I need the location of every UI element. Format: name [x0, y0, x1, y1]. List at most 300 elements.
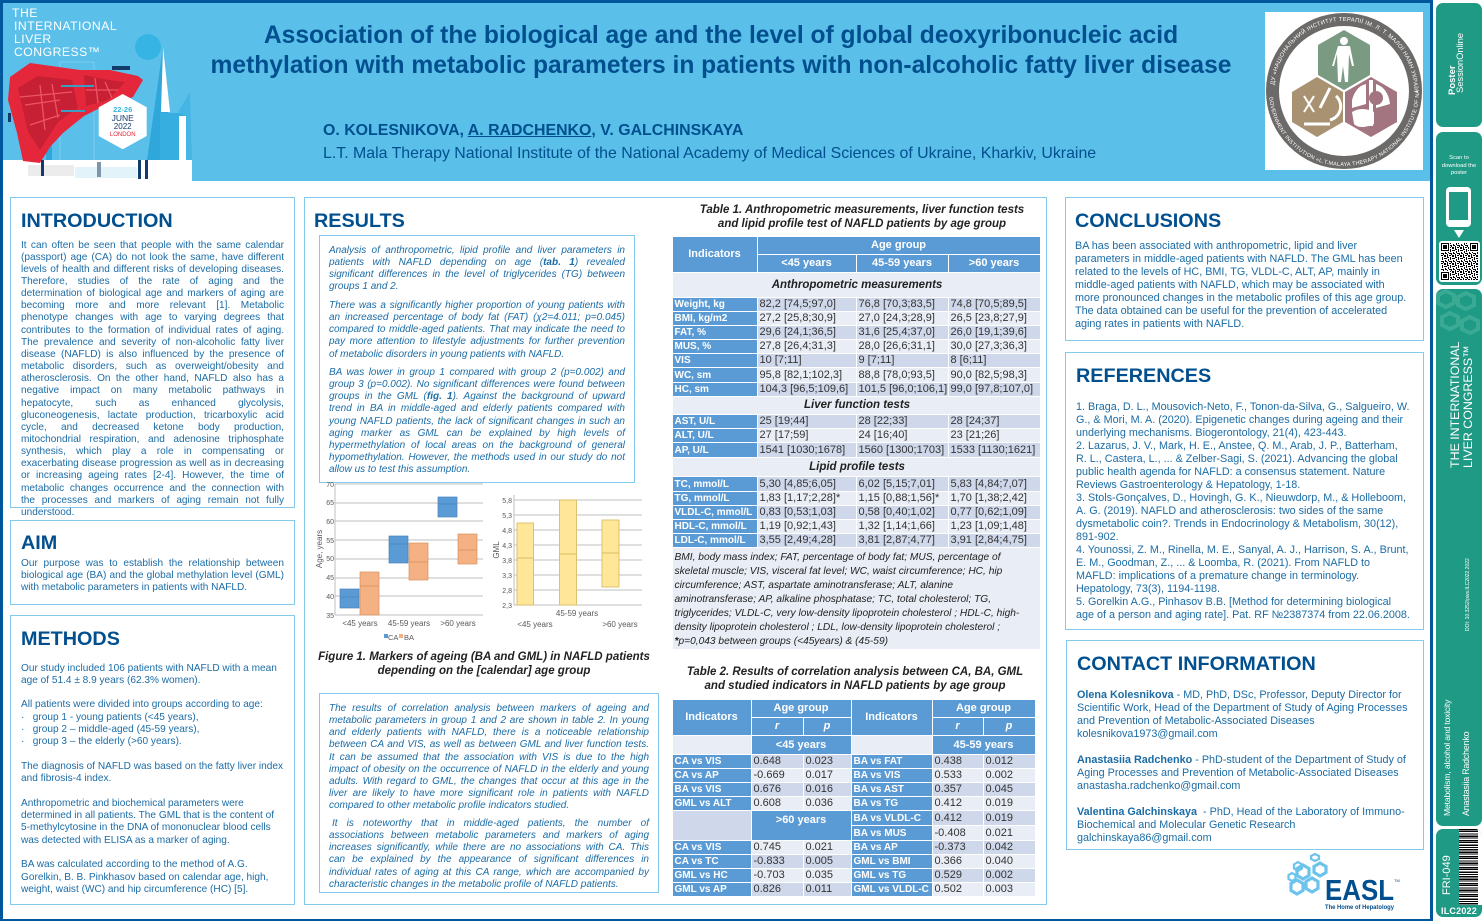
text: references: R. L., Castera, L., ... & Zelber-Sagi, S. (2021). Advancing the global: [1076, 453, 1398, 465]
table 2: 0.502: [934, 883, 962, 895]
text: results paragraph 1: patients with NAFLD depending on age (tab. 1) revealed: [329, 257, 625, 268]
text: references: 3. Stols-Gonçalves, D., Hovingh, G. K., Nieuwdorp, M., & Holleboom,: [1076, 492, 1406, 504]
text: references: 4. Younossi, Z. M., Rinella, M. E., Sanyal, A. J., Harrison, S. A., Brunt,: [1076, 544, 1408, 556]
table 1: 28 [22;33]: [858, 415, 907, 427]
congress banner graphic: [3, 3, 192, 179]
text: results paragraph 3: hypermethylation of local areas on the background of general: [329, 440, 625, 451]
text: results paragraph 2: pay more attention to lifestyle adjustments for further prevention: [329, 336, 625, 347]
table 1: MUS, %: [674, 341, 711, 352]
y axis ticks: 65: [326, 500, 334, 507]
table 2: GML vs ALT: [674, 798, 732, 809]
title: [211, 22, 1231, 79]
panel: correlation text box: [319, 693, 659, 893]
icon: date hexagon: 2022: [114, 122, 132, 131]
heading: results: RESULTS: [314, 210, 405, 232]
y axis ticks: 70: [326, 482, 334, 489]
text: references: Reviews Gastroenterology & Hepatology, 1-18.: [1076, 479, 1300, 491]
heading: conclusions: CONCLUSIONS: [1075, 210, 1221, 232]
table 1: BMI, kg/m2: [674, 313, 727, 324]
text: methods: determined in all patients. The GML that is the content of: [21, 810, 274, 821]
conference tag: ILC2022: [1441, 906, 1477, 916]
y axis ticks: [502, 498, 512, 610]
icon: red liver: [8, 63, 143, 163]
table 2: <45 years: [776, 738, 826, 750]
table 1: 1,19 [0,92;1,43]: [760, 520, 836, 532]
text: correlation paragraph 2: [329, 818, 650, 890]
table 1: ALT, U/L: [674, 430, 714, 441]
x axis labels: >60 years: [602, 620, 638, 629]
text: contact information: Aging Processes and Prevention of Metabolic-Associated Diseases: [1077, 767, 1399, 779]
text: contact information: galchinskaya86@gmail.com: [1077, 832, 1212, 844]
table 1: 28,0 [26,6;31,1]: [858, 340, 935, 352]
table 1: 76,8 [70,3;83,5]: [858, 298, 935, 310]
y axis ticks: [326, 482, 334, 620]
table 1: HDL-C, mmol/L: [674, 521, 747, 532]
presenter vertical: Anastasiia Radchenko: [1461, 732, 1471, 816]
table 1: VIS: [674, 355, 691, 366]
table 2: 0.529: [934, 869, 962, 881]
table 1: BMI, body mass index; FAT, percentage of body fat; MUS, percentage of: [674, 552, 1000, 563]
text: introduction: the processes and markers of aging remain not fully: [21, 495, 284, 506]
table 2: 0.003: [986, 883, 1013, 895]
table 2: -0.408: [934, 826, 966, 838]
text: results paragraph 2: an increased percentage of body fat (FAT) (χ2=4.011; p=0.045): [329, 312, 625, 323]
text: introduction: atherosclerosis. On the other hand, NAFLD also has a: [21, 373, 284, 384]
table 1: 26,0 [19,1;39,6]: [950, 326, 1027, 338]
authors: O. KOLESNIKOVA, A. RADCHENKO, V. GALCHINSKAYA: [323, 122, 743, 139]
session online wordmark: SessionOnline: [1455, 33, 1466, 93]
text: references: age of a person and aging rate]. Pat. RF №2387374 from 22.06.2008.: [1076, 609, 1410, 621]
x axis labels: [342, 619, 476, 628]
table 2: BA vs TG: [854, 798, 898, 809]
table 1: 8 [6;11]: [950, 354, 986, 366]
x axis labels: [517, 609, 638, 629]
EASL logo: [1287, 852, 1400, 911]
table 1: *p=0,043 between groups (<45years) & (45-59): [674, 636, 888, 647]
table 2: GML vs BMI: [854, 856, 911, 867]
text: conclusions: [1075, 240, 1406, 330]
text: contact information: Valentina Galchinskaya - PhD, Head of the Laboratory of Immuno-: [1077, 806, 1405, 818]
table 1: 10 [7;11]: [760, 354, 802, 366]
table 1: 3,81 [2,87;4,77]: [858, 534, 935, 546]
text: conclusions: more pronounced changes in the metabolic profiles of this age group.: [1075, 292, 1406, 304]
y axis ticks: 35: [326, 613, 334, 620]
text: results paragraph 3: aging marker as GML can be explained by high levels of: [329, 428, 625, 439]
topic vertical: Metabolism, alcohol and toxicity: [1442, 700, 1452, 816]
legend: BA: [404, 633, 414, 642]
text: introduction: becoming more and more relevant [1]. Metabolic: [21, 300, 284, 311]
text: correlation paragraph 2: characteristic changes in the metabolic profile of NAFLD patients.: [329, 879, 619, 890]
table 2: 0.021: [986, 826, 1013, 838]
table 1: 29,6 [24,1;36,5]: [760, 326, 836, 338]
table 2: 0.826: [754, 883, 781, 895]
table 2: 0.002: [986, 769, 1013, 781]
text: introduction: determination of biological age and markers of aging are: [21, 288, 284, 299]
table 1: 0,77 [0,62;1,09]: [950, 506, 1027, 518]
table 1: 1,15 [0,88;1,56]*: [858, 492, 939, 504]
EASL tagline: The Home of Hepatology: [1325, 905, 1395, 911]
icon: city towers: [46, 47, 192, 162]
text: introduction: synthesis, which play a role in compensating or: [21, 446, 284, 457]
y axis ticks: 3,8: [502, 558, 512, 565]
text: methods: · group 1 - young patients (<45 years),: [21, 712, 199, 723]
y axis ticks: 50: [326, 556, 334, 563]
ground: [3, 160, 192, 181]
text: correlation paragraph 2: individual rates of aging at this CA range, which are accompanied by: [329, 867, 649, 878]
x axis labels: >60 years: [440, 619, 476, 628]
icon: date hexagon: 22-26: [113, 105, 132, 114]
heading: introduction: INTRODUCTION: [21, 210, 173, 232]
y axis ticks: 3,3: [502, 573, 512, 580]
text: introduction: Therefore, studies of the rate of aging and the: [21, 276, 284, 287]
poster wordmark: Poster: [1447, 65, 1458, 95]
text: correlation paragraph 1: liver are likely to have more significant role in patients with NAFLD: [329, 788, 649, 799]
text: contact information: anastasha.radchenko@gmail.com: [1077, 780, 1240, 792]
table 2: GML vs VLDL-C: [854, 884, 929, 895]
table 2: -0.703: [754, 869, 785, 881]
text: references: dysmetabolic coin?. Trends in Endocrinology & Metabolism, 30(12),: [1076, 518, 1398, 530]
barcode: [1459, 829, 1482, 905]
text: contact information: Biochemical and Molecular Genetic Research: [1077, 819, 1295, 831]
text: correlation paragraph 1: between CA and VIS, as well as between GML and liver function tests.: [329, 739, 649, 750]
legend: [384, 633, 414, 642]
text: methods: Anthropometric and biochemical parameters were: [21, 798, 244, 809]
table 1: 30,0 [27,3;36,3]: [950, 340, 1027, 352]
figure caption: Figure 1. Markers of ageing (BA and GML) in NAFLD patients: [318, 651, 650, 663]
text: methods: All patients were divided into groups according to age:: [21, 699, 263, 710]
table 2: 0.016: [806, 783, 833, 795]
table 2: CA vs AP: [674, 770, 719, 781]
table 2: 0.005: [806, 855, 833, 867]
text: results paragraph 3: trend in BA in middle-aged and elderly patients compared with: [329, 403, 625, 414]
text: introduction: metabolic disorders, such as overweight/obesity and: [21, 361, 284, 372]
table 2: 0.366: [934, 855, 962, 867]
table 1: 27 [17;59]: [760, 429, 808, 441]
sidebar: poster session online: [1436, 3, 1482, 127]
text: methods: · group 3 – the elderly (>60 years).: [21, 736, 182, 747]
text: methods: The diagnosis of NAFLD was based on the fatty liver index: [21, 761, 283, 772]
text: methods: Gorelkin, B. B. Pinkhasov based on calendar age, high,: [21, 872, 268, 883]
heading: aim: AIM: [21, 532, 57, 554]
text: methods: was detected with ELISA as a marker of aging.: [21, 835, 230, 846]
congress name vertical: LIVER CONGRESS™: [1460, 345, 1474, 468]
text: correlation paragraph 2: associations between metabolic parameters and markers of aging: [329, 830, 649, 841]
table 1: 23 [21;26]: [950, 429, 999, 441]
text: contact information: Scientific Work, Head of the Department of Study of Aging Processes: [1077, 702, 1407, 714]
table 2: 0.045: [986, 783, 1013, 795]
text: contact information: Anastasiia Radchenko - PhD-student of the Department of Study of: [1077, 754, 1406, 766]
y axis ticks: 55: [326, 538, 334, 545]
table 1: 3,91 [2,84;4,75]: [950, 534, 1027, 546]
text: results paragraph 3: hypomethylation. However, the methods used in our study do not: [329, 452, 625, 463]
text: introduction: contributes to the formation of individual rates of aging.: [21, 325, 284, 336]
text: results paragraph 3: BA was lower in group 1 compared with group 2 (p=0.002) and: [329, 367, 625, 378]
text: introduction: The prevalence and severity of non-alcoholic fatty liver: [21, 337, 284, 348]
table 1: 27,0 [24,3;28,9]: [858, 312, 935, 324]
text: conclusions: aging rates in patients with NAFLD.: [1075, 318, 1244, 330]
table 1: 31,6 [25,4;37,0]: [858, 326, 935, 338]
table 2: r: [775, 720, 779, 732]
text: introduction: understood.: [21, 507, 74, 518]
table 1: 1,32 [1,14;1,66]: [858, 520, 935, 532]
panel: contact information: [1066, 640, 1424, 850]
text: results paragraph 3: groups in the GML (fig. 1). Against the background of upward: [329, 391, 625, 402]
table 1: Lipid profile tests: [809, 460, 905, 472]
icon: arrow: [1454, 230, 1464, 238]
text: introduction: hepatocyte, such as enhanced glycolysis,: [21, 398, 284, 409]
y axis ticks: 45: [326, 575, 334, 582]
text: references: G., & Mori, M. A. (2020). Epigenetic changes during ageing and their: [1076, 414, 1403, 426]
table 1: HC, sm: [674, 384, 709, 395]
heading: references: REFERENCES: [1076, 365, 1211, 387]
text: methods: 5-methylcytosine in the DNA of mononuclear blood cells: [21, 822, 271, 833]
table 2: >60 years: [776, 814, 826, 826]
table 2: 0.648: [754, 755, 781, 767]
text: results paragraph 3: [328, 367, 626, 475]
institute logo: [1265, 12, 1423, 170]
text: introduction: disease (NAFLD) is also influenced by the presence of: [21, 349, 284, 360]
table 2: 0.019: [986, 812, 1013, 824]
table 2: 0.676: [754, 783, 781, 795]
table 2: 0.745: [754, 841, 781, 853]
text: methods: Our study included 106 patients with NAFLD with a mean: [21, 662, 277, 674]
sidebar: congress panel: [1436, 289, 1482, 826]
table 2: 0.019: [986, 797, 1013, 809]
table 1: 3,55 [2,49;4,28]: [760, 534, 836, 546]
chart: GML box plot: [492, 495, 642, 629]
text: methods: · group 2 – middle-aged (45-59 years),: [21, 724, 199, 735]
y axis ticks: 4,3: [502, 543, 512, 550]
table 1: 9 [7;11]: [858, 354, 894, 366]
table 2: Indicators: [865, 711, 918, 723]
table 2: 0.412: [934, 812, 962, 824]
text: methods: age of 51.4 ± 8.9 years (62.3% women).: [21, 675, 200, 686]
title: methylation with metabolic parameters in patients with non-alcoholic fatty liver disease: [211, 52, 1231, 79]
table 1: FAT, %: [674, 327, 706, 338]
affiliation: L.T. Mala Therapy National Institute of the National Academy of Medical Sciences of Ukraine, Kharkiv, Ukraine: [323, 145, 1096, 162]
text: conclusions: related to the levels of HC, BMI, TG, VLDL-C, ALT, AP, mainly in: [1075, 266, 1380, 278]
table 1: aminotransferase; AP, alkaline phosphatase; TC, total cholesterol; TG,: [674, 594, 991, 605]
icon: date hexagon: [99, 94, 147, 149]
text: correlation paragraph 2: increases significantly, while there are no associations with CA. This: [329, 842, 649, 853]
text: aim: biological age (BA) and the global methylation level (GML): [21, 570, 284, 581]
text: methods: [21, 662, 283, 895]
EASL wordmark: EASL: [1325, 875, 1394, 907]
table 2: r: [955, 720, 960, 732]
table 2: -0.373: [934, 841, 966, 853]
text: introduction: (passport) age (CA) do not look the same, have different: [21, 252, 284, 263]
table 1: 5,30 [4,85;6,05]: [760, 478, 836, 490]
table 2: 0.608: [754, 797, 781, 809]
table 1: 26,5 [23,8;27,9]: [950, 312, 1027, 324]
title: Association of the biological age and the level of global deoxyribonucleic acid: [264, 22, 1178, 49]
text: correlation paragraph 2: can be explained by the appearance of significant differences in: [329, 854, 649, 865]
y axis ticks: 4,8: [502, 528, 512, 535]
table 2: BA vs VIS: [854, 770, 900, 781]
y axis ticks: 2,8: [502, 588, 512, 595]
table 1: Weight, kg: [674, 299, 725, 310]
table 1: >60 years: [969, 257, 1019, 269]
legend: CA: [388, 633, 398, 642]
table 1: 1541 [1030;1678]: [760, 444, 845, 456]
text: correlation paragraph 2: It is noteworthy that in middle-aged patients, the number of: [332, 818, 649, 829]
text: results paragraph 1: groups 1 and 2.: [329, 281, 398, 292]
table 1: [673, 237, 1040, 649]
congress name: LIVER: [14, 32, 52, 46]
table 1: 1560 [1300;1703]: [858, 444, 944, 456]
text: introduction: negative impact on many metabolic pathways in: [21, 385, 284, 396]
table 2: CA vs VIS: [674, 756, 721, 767]
table 1: 6,02 [5,15;7,01]: [858, 478, 935, 490]
table 2: BA vs VIS: [674, 784, 721, 795]
table 1: TC, mmol/L: [674, 478, 729, 490]
table 1: Age group: [871, 239, 926, 251]
table 2: 0.040: [986, 855, 1013, 867]
x axis labels: <45 years: [342, 619, 378, 628]
text: introduction: or increasing ageing rates [2-4]. However, the time of: [21, 470, 284, 481]
people figures: [8, 66, 148, 179]
table 2: 0.042: [986, 841, 1013, 853]
text: references: 891-902.: [1076, 531, 1119, 543]
text: correlation paragraph 1: The results of correlation analysis between markers of ageing and: [329, 703, 649, 714]
table 1: 1533 [1130;1621]: [950, 444, 1035, 456]
figure caption: [318, 651, 650, 677]
figure caption: depending on the [calendar] age group: [378, 665, 590, 677]
table 1: 24 [16;40]: [858, 429, 907, 441]
table 1: 5,83 [4,84;7,07]: [950, 478, 1027, 490]
congress name: INTERNATIONAL: [14, 19, 117, 33]
x axis labels: <45 years: [517, 620, 553, 629]
y axis ticks: 60: [326, 519, 334, 526]
table 2: -0.669: [754, 769, 785, 781]
text: references: 1. Braga, D. L., Mousovich-Neto, F., Tonon-da-Silva, G., Salgueiro, W.: [1076, 401, 1409, 413]
table 1: Anthropometric measurements: [772, 278, 942, 290]
text: introduction: levels of health and different risks of developing diseases.: [21, 264, 284, 275]
text: introduction: cycle, and decreased ketone body production,: [21, 422, 284, 433]
text: introduction: phenotype changes with age to varying degrees that: [21, 312, 284, 323]
text: conclusions: The data obtained can be useful for the prevention of accelerated: [1075, 305, 1387, 317]
table 2: Indicators: [685, 711, 738, 723]
table 2: 0.035: [806, 869, 833, 881]
table 1: 28 [24;37]: [950, 415, 999, 427]
panel: introduction: [10, 197, 295, 508]
text: introduction: exacerbating disease progression as well as in decreasing: [21, 458, 284, 469]
text: conclusions: parameters in middle-aged patients with NAFLD. The GML has been: [1075, 253, 1403, 265]
table 2: 0.011: [806, 883, 832, 895]
x axis labels: 45-59 years: [388, 619, 430, 628]
text: aim: with metabolic parameters in patients with NAFLD.: [21, 582, 247, 593]
table 1: 0,83 [0,53;1,03]: [760, 506, 836, 518]
table 2: p: [1006, 720, 1012, 732]
congress name vertical: [1448, 342, 1474, 468]
icon: phone: [1446, 187, 1471, 227]
panel: methods: [10, 615, 295, 905]
congress name: [12, 6, 117, 59]
heading: methods: METHODS: [21, 628, 120, 650]
table 2 caption: and studied indicators in NAFLD patients by age group: [705, 680, 1005, 692]
table 1: Liver function tests: [804, 399, 910, 411]
panel: conclusions: [1065, 197, 1424, 341]
text: references: 5. Gorelkin A.G., Pinhasov B.B. [Method for determining biological: [1076, 596, 1391, 608]
text: contact information: kolesnikova1973@gmail.com: [1077, 728, 1218, 740]
panel: aim: [10, 520, 295, 605]
table 1: circumference; AST, aspartate aminotransferase; ALT, alanine: [674, 580, 953, 591]
text: introduction: [21, 240, 284, 518]
table 2: 0.012: [986, 755, 1013, 767]
text: results paragraph 3: allow us to test this assumption.: [329, 464, 470, 475]
text: contact information: and Prevention of Metabolic-Associated Diseases: [1077, 715, 1315, 727]
table 1: density lipoprotein cholesterol ; LDL, low-density lipoprotein cholesterol ;: [674, 622, 1000, 633]
table 1: 1,70 [1,38;2,42]: [950, 492, 1027, 504]
hexagon pattern: [1436, 289, 1480, 335]
text: correlation paragraph 1: It can be assumed that the association with VIS is due to the high: [329, 752, 649, 763]
table 2: GML vs TG: [854, 870, 906, 881]
table 1: AST, U/L: [674, 416, 715, 427]
table 1: <45 years: [781, 257, 832, 269]
text: references: MAFLD: implications of a premature change in terminology.: [1076, 570, 1359, 582]
heading: contact information: CONTACT INFORMATION: [1077, 653, 1316, 675]
table 1: 27,2 [25,8;30,9]: [760, 312, 836, 324]
table 1: 99,0 [97,8;107,0]: [950, 383, 1033, 395]
text: correlation paragraph 1: compared to other metabolic profile indicators studied.: [329, 800, 569, 811]
table 2: 0.036: [806, 797, 833, 809]
text: correlation paragraph 1: [329, 703, 650, 811]
table 2: CA vs VIS: [674, 842, 721, 853]
table 1: WC, sm: [674, 370, 711, 380]
text: references: public health agenda for NAFLD: a consensus statement. Nature: [1076, 466, 1385, 478]
text: references: A. G. (2019). NAFLD and atherosclerosis: two sides of the same: [1076, 505, 1383, 517]
text: results paragraph 1: Analysis of anthropometric, lipid profile and liver parameters in: [329, 245, 625, 256]
y axis title: Age, years: [315, 530, 324, 568]
text: references: underlying mechanisms. Biogerontology, 21(4), 423-443.: [1076, 427, 1346, 439]
table 2: BA vs AST: [854, 784, 904, 795]
table 2: GML vs AP: [674, 884, 727, 895]
icon: body hexagon: [1318, 30, 1370, 90]
table 1: Indicators: [688, 248, 741, 260]
CA boxes: [340, 497, 457, 608]
table 2: 0.412: [934, 797, 962, 809]
text: results paragraph 3: young NAFLD patients, the lack of significant changes in such an: [329, 416, 625, 427]
code vertical: FRI-049: [1441, 855, 1453, 895]
chart: age box plot: [315, 482, 483, 642]
y axis ticks: 40: [326, 594, 334, 601]
table 2: Age group: [774, 702, 828, 714]
text: references: 2. Lazarus, J. V., Mark, H. E., Anstee, Q. M., Arab, J. P., Batterham,: [1076, 440, 1398, 452]
text: correlation paragraph 1: impact of obesity on the occurrence of NAFLD in the elderly and young: [329, 764, 649, 775]
table 1: TG, mmol/L: [674, 493, 730, 504]
text: results paragraph 3: group 3 (p=0.002). No significant differences were found between: [329, 379, 625, 390]
text: conclusions: BA has been associated with anthropometric, lipid and liver: [1075, 240, 1357, 252]
table 1: 25 [19;44]: [760, 415, 808, 427]
table 2: [673, 700, 1035, 896]
table 2: 0.023: [806, 755, 833, 767]
table 2: p: [824, 720, 830, 732]
table 2: 0.533: [934, 769, 962, 781]
table 2: 45-59 years: [954, 738, 1013, 750]
BA boxes: [360, 534, 477, 615]
y axis ticks: 2,3: [502, 603, 512, 610]
text: methods: and fibrosis-4 index.: [21, 773, 111, 784]
table 1: 101,5 [96,0;106,1]: [858, 383, 947, 395]
table 2: -0.833: [754, 855, 785, 867]
text: aim: [21, 558, 284, 593]
panel: results: [304, 197, 1047, 905]
text: contact information: Olena Kolesnikova - MD, PhD, DSc, Professor, Deputy Director for: [1077, 689, 1402, 701]
table 1: 45-59 years: [872, 257, 932, 269]
text: references: Hepatology, 73(3), 1194-1198.: [1076, 583, 1220, 595]
text: correlation paragraph 1: metabolic parameters in group 1 and 2 are shown in table 2. In young: [329, 715, 649, 726]
text: results paragraph 2: There was a significantly higher proportion of young patients with: [329, 300, 625, 311]
